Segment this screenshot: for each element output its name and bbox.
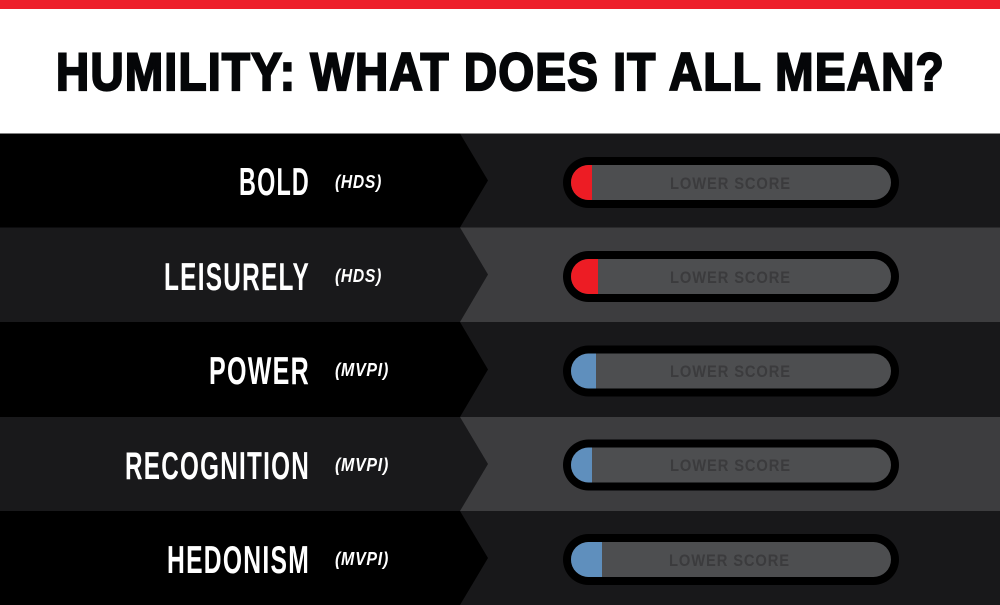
label: Hedonism: HEDONISM <box>167 539 310 582</box>
label: Power: POWER <box>209 350 310 393</box>
score pill: Recognition <box>563 440 899 490</box>
row: Leisurely (HDS) <box>0 228 1000 322</box>
row: Recognition (MVPI) <box>0 417 1000 511</box>
score pill: Bold: LOWER SCORE <box>670 175 791 193</box>
score pill: Hedonism: LOWER SCORE <box>669 552 790 570</box>
score pill: Power <box>563 346 899 396</box>
row: Hedonism (MVPI) <box>0 511 1000 605</box>
score pill: Power: LOWER SCORE <box>670 363 791 381</box>
score pill: Bold <box>563 157 899 208</box>
row: Power (MVPI) <box>0 322 1000 417</box>
row: Bold (HDS) <box>0 134 1000 228</box>
score pill: Recognition: LOWER SCORE <box>670 457 791 475</box>
score pill: Leisurely: LOWER SCORE <box>670 269 791 287</box>
tag: MVPI: (MVPI) <box>335 360 389 380</box>
tag: MVPI: (MVPI) <box>335 455 389 475</box>
tag: HDS: (HDS) <box>335 266 382 286</box>
tag: HDS: (HDS) <box>335 172 382 192</box>
label: Recognition: RECOGNITION <box>125 445 310 488</box>
label: Bold: BOLD <box>239 161 310 204</box>
top red bar <box>0 0 1000 9</box>
score pill: Leisurely <box>563 251 899 302</box>
tag: MVPI: (MVPI) <box>335 549 389 569</box>
label: Leisurely: LEISURELY <box>164 256 310 299</box>
score pill: Hedonism <box>563 534 899 585</box>
